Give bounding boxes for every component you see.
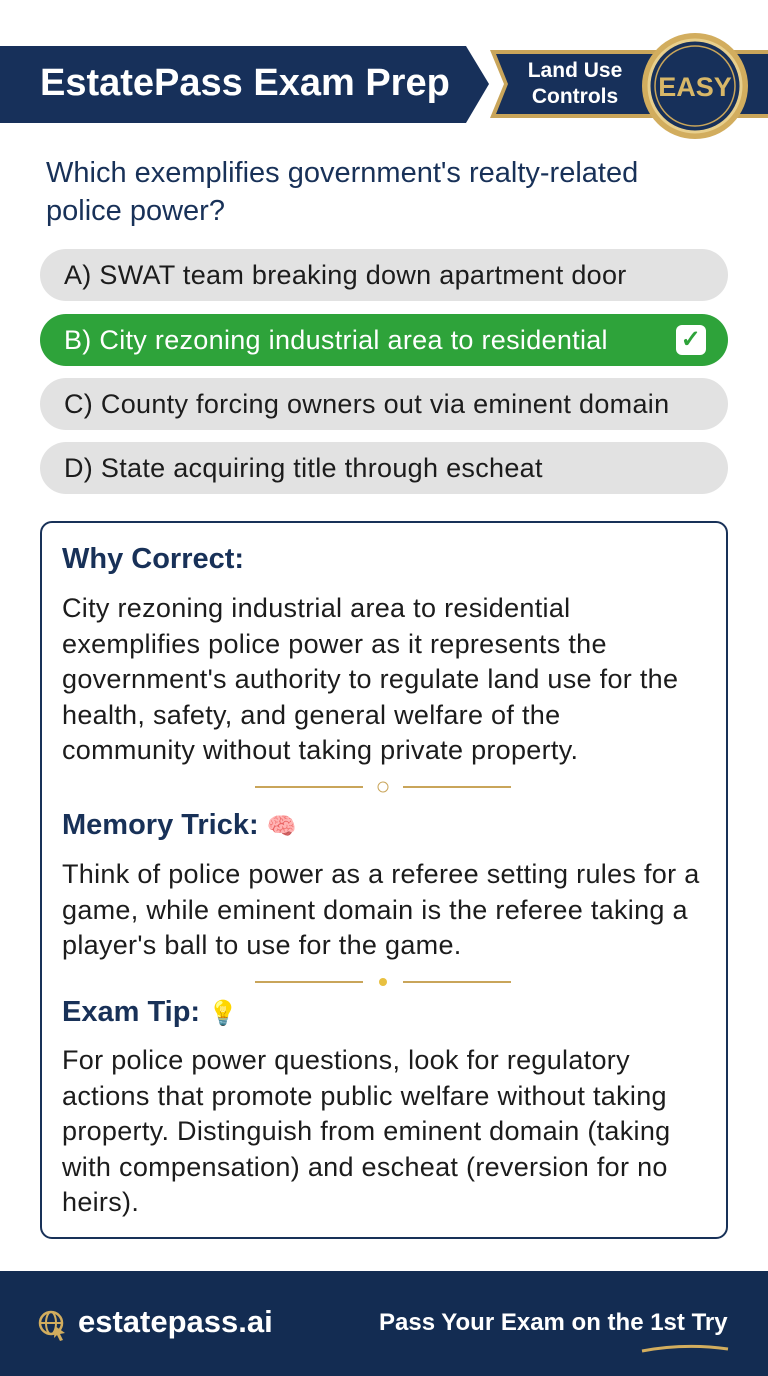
divider icon brain xyxy=(255,782,511,792)
option A xyxy=(40,249,728,301)
option B correct xyxy=(40,314,728,366)
title: EstatePass Exam Prep xyxy=(40,62,450,104)
option D xyxy=(40,442,728,494)
divider icon bulb xyxy=(255,978,511,986)
option C: C) County forcing owners out via eminent domain xyxy=(64,389,669,419)
text: exam tip: For police power questions, look for regulatory actions that promote public welfare without taking property. Distinguish from eminent domain (taking with compensation) and escheat (reversion for no heirs). xyxy=(62,1045,670,1217)
category ribbon: Land Use xyxy=(528,59,622,82)
icon: check: ✓ xyxy=(681,326,701,353)
question: Which exemplifies government's realty-related police power? xyxy=(46,157,638,227)
heading: why correct: Why Correct: xyxy=(62,543,244,575)
heading: exam tip: Exam Tip: 💡 xyxy=(62,996,238,1028)
category ribbon: Controls xyxy=(532,85,618,108)
option C xyxy=(40,378,728,430)
footer tagline: Pass Your Exam on the 1st Try xyxy=(379,1309,728,1336)
option D: D) State acquiring title through escheat xyxy=(64,453,543,483)
option B correct: B) City rezoning industrial area to residential xyxy=(64,325,608,355)
option A: A) SWAT team breaking down apartment door xyxy=(64,260,627,290)
footer logo text: estatepass.ai xyxy=(78,1304,273,1339)
footer xyxy=(0,1271,768,1376)
heading: memory trick: Memory Trick: 🧠 xyxy=(62,809,297,841)
text: why correct: City rezoning industrial area to residential exemplifies police power as it represents the government's authority to regulate land use for the health, safety, and general welfare of the community without taking private property. xyxy=(62,593,678,765)
badge: EASY xyxy=(642,33,748,139)
header banner xyxy=(0,46,489,123)
icon: check xyxy=(676,325,706,355)
panel: explanation xyxy=(40,521,728,1239)
badge: EASY: EASY xyxy=(658,72,732,102)
icon: globe xyxy=(38,1310,65,1341)
text: memory trick: Think of police power as a referee setting rules for a game, while eminent domain is the referee taking a player's ball to use for the game. xyxy=(62,859,700,960)
category ribbon xyxy=(490,50,768,118)
